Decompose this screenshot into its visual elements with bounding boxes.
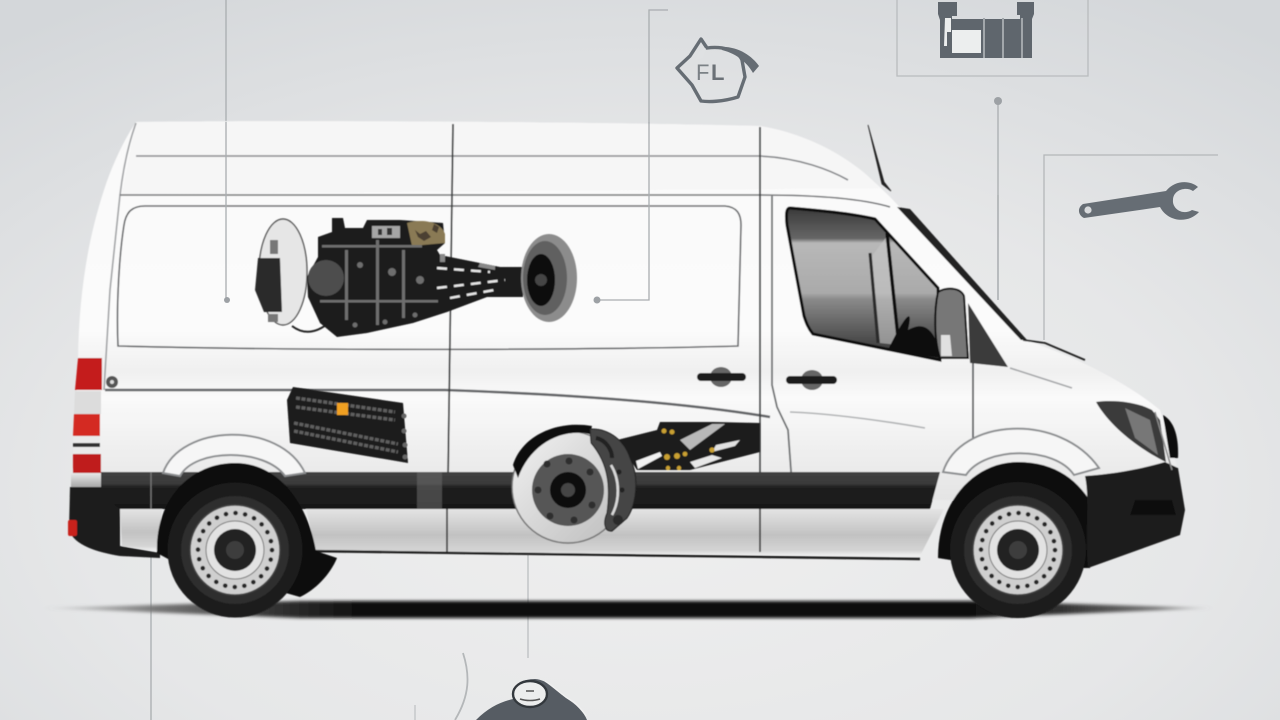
windshield strip bbox=[897, 207, 1027, 340]
icon: wrench bbox=[1079, 182, 1199, 220]
lower sill panels bbox=[120, 509, 162, 551]
rear wheel bbox=[168, 482, 302, 618]
door handles bbox=[697, 367, 837, 390]
mirror bbox=[935, 289, 1008, 367]
front wheel bbox=[950, 482, 1086, 618]
component: brake disc and arm bbox=[512, 422, 760, 543]
icon: battery / component box bbox=[938, 2, 1034, 58]
antenna bbox=[868, 125, 891, 191]
front wheel arch bbox=[943, 429, 1099, 475]
headlight bbox=[1096, 401, 1166, 462]
grille line bbox=[1155, 412, 1172, 470]
component: battery pack bbox=[287, 387, 408, 463]
ground shadow bbox=[40, 601, 1215, 618]
door seams bbox=[447, 124, 973, 552]
rear wheel arch bbox=[163, 435, 305, 476]
component: drivetrain assembly bbox=[255, 218, 577, 337]
side window bbox=[786, 208, 942, 360]
icon: tank cap with FL label: L bbox=[711, 60, 724, 85]
roof shading bbox=[122, 121, 880, 194]
van body shell bbox=[72, 121, 1178, 500]
tail light bbox=[73, 358, 102, 473]
lower dark stripe bbox=[100, 472, 940, 509]
callout dots bbox=[224, 97, 1002, 304]
icon: tank cap with FL label bbox=[677, 39, 759, 102]
callout lines over body bbox=[226, 122, 998, 300]
rear bumper bbox=[69, 487, 160, 558]
van bbox=[68, 121, 1185, 618]
icon: reservoir at bottom bbox=[476, 679, 587, 720]
icon: tank cap with FL label: F bbox=[696, 60, 709, 85]
front bumper bbox=[1085, 462, 1185, 568]
